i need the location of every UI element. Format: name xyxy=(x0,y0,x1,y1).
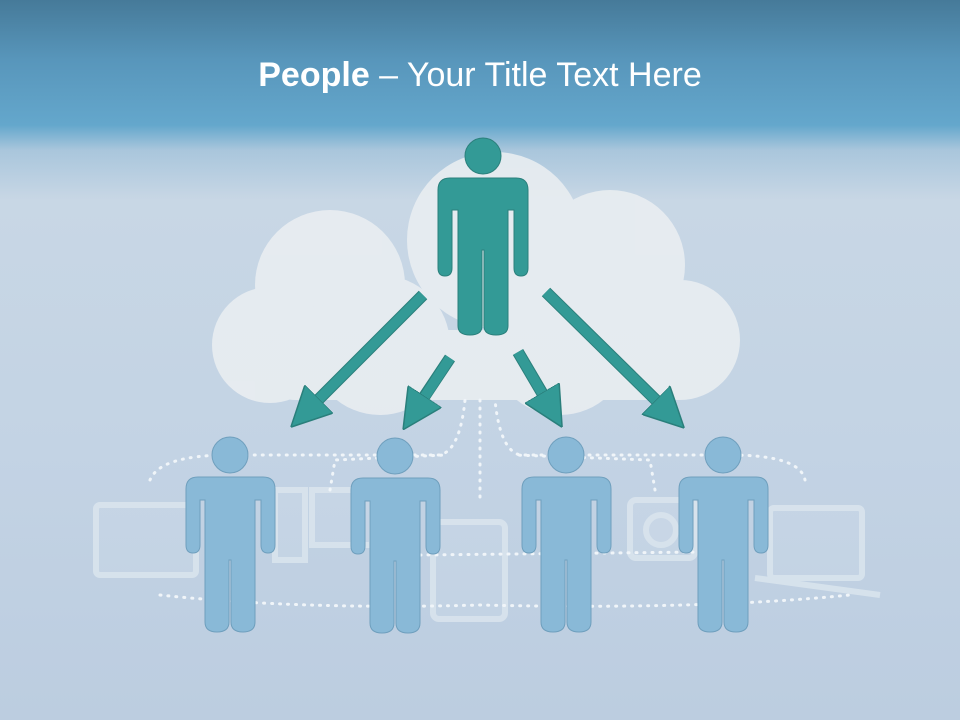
bottom person 1 xyxy=(186,437,275,632)
cloud xyxy=(212,152,740,415)
dotted network lines xyxy=(150,400,850,606)
bottom person 4 xyxy=(679,437,768,632)
top person (teal) xyxy=(438,138,528,335)
bottom person 2 xyxy=(351,438,440,633)
bottom person 3 xyxy=(522,437,611,632)
devices xyxy=(96,490,880,619)
arrows xyxy=(305,292,670,414)
title: People – Your Title Text Here xyxy=(258,56,702,94)
